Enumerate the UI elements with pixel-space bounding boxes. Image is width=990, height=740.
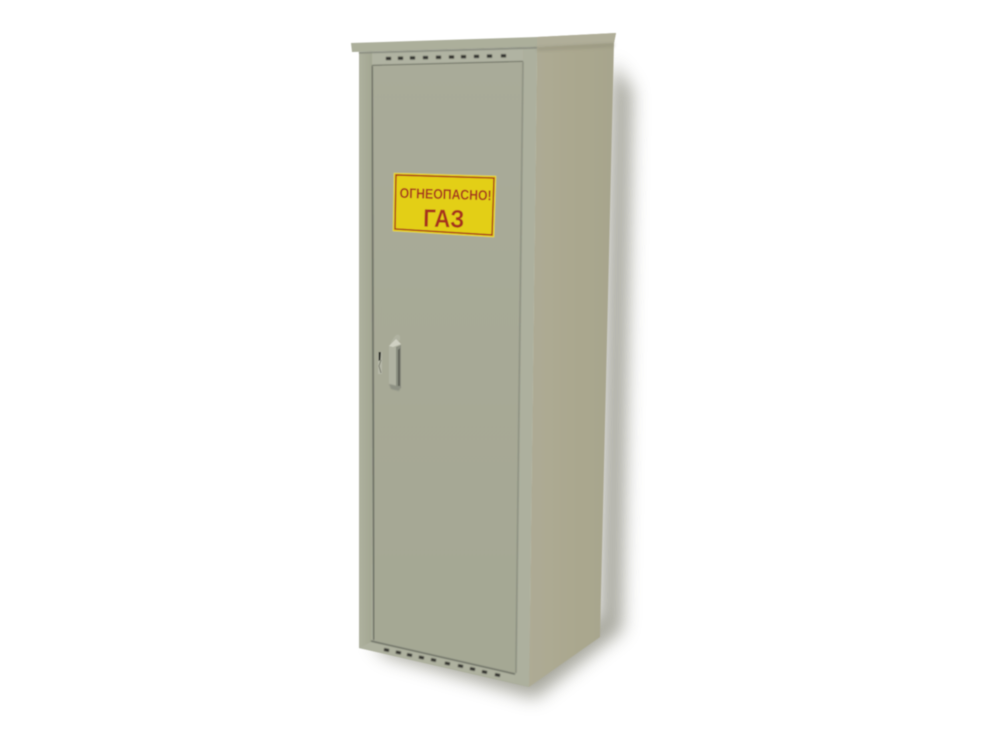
door	[372, 62, 523, 673]
warning sign	[393, 173, 496, 237]
frame right stile	[515, 47, 537, 687]
top vent strip	[372, 48, 523, 66]
cabinet drop shadow	[372, 62, 632, 698]
sign text: gas: ГАЗ	[423, 204, 465, 234]
door handle	[389, 335, 401, 391]
front frame	[359, 47, 537, 687]
bottom vent strip	[359, 641, 515, 683]
roof	[351, 33, 616, 54]
side panel	[529, 42, 614, 687]
sign text: warning: ОГНЕОПАСНО!	[399, 185, 492, 203]
door lock	[378, 352, 382, 374]
gas cabinet	[351, 33, 616, 687]
frame left stile	[359, 52, 372, 648]
